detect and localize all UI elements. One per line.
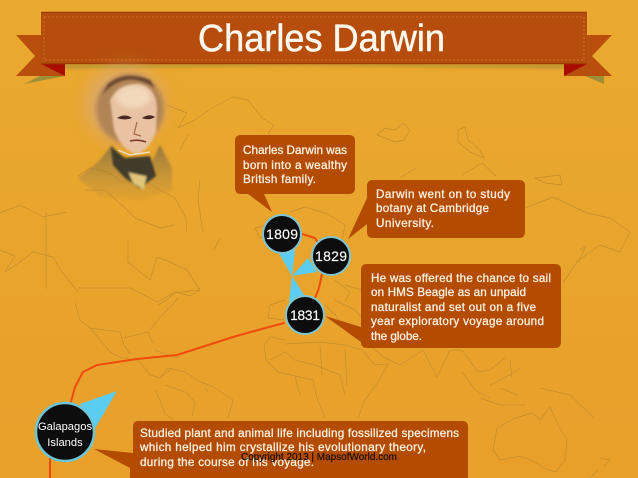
hair: [96, 74, 164, 144]
face: [110, 84, 157, 154]
Japan and far east: [535, 175, 586, 262]
callout: 1829 Cambridge: Darwin went on to study: [376, 188, 510, 201]
Alaska and northwest coast: [0, 205, 78, 292]
banner body: [41, 12, 587, 64]
Asia: [363, 197, 630, 377]
callout: Galapagos studies: which helped him crystallize his evolutionary theory,: [139, 441, 426, 454]
callout: 1831 HMS Beagle: naturalist and set out on a five: [371, 301, 536, 314]
Canadian Arctic and Canada: [78, 168, 200, 305]
South America: [155, 368, 233, 421]
callout: 1809 birth: born into a wealthy: [243, 159, 347, 172]
callout: 1809 birth: Charles Darwin was: [243, 144, 347, 157]
callout: 1831 HMS Beagle: the globe.: [371, 330, 422, 343]
neck stock and shirt: [111, 147, 156, 188]
callout: Galapagos studies: [94, 421, 468, 478]
marker: Galapagos Islands: Islands: [47, 437, 83, 449]
blue pointer wedges: [80, 250, 317, 430]
callout: Galapagos studies: Studied plant and animal life including fossilized specimens: [140, 427, 459, 440]
marker: 1831: 1831: [290, 307, 320, 323]
world map outline: [0, 97, 630, 478]
callout: 1829 Cambridge: University.: [376, 217, 434, 230]
marker: 1809: [263, 215, 301, 253]
callout: 1829 Cambridge: botany at Cambridge: [376, 202, 489, 215]
callout: 1831 HMS Beagle: on HMS Beagle as an unpaid: [371, 286, 526, 299]
Africa: [264, 337, 388, 418]
title banner: [16, 12, 612, 84]
marker: 1831: [286, 296, 324, 334]
marker: 1809: 1809: [266, 226, 298, 242]
coat: [78, 145, 172, 200]
callout: Galapagos studies: during the course of his voyage.: [140, 456, 314, 469]
banner shadow: [41, 64, 587, 69]
orange voyage route: [50, 234, 322, 478]
Central America and Caribbean: [143, 350, 178, 378]
callout: 1831 HMS Beagle: [325, 264, 561, 348]
Europe: [255, 207, 362, 328]
callout: 1809 birth: [235, 135, 355, 212]
callout: 1831 HMS Beagle: He was offered the chance to sail: [371, 272, 551, 285]
portrait of Charles Darwin: [78, 67, 172, 200]
Greenland: [167, 97, 274, 250]
marker: 1829: 1829: [315, 248, 347, 264]
facial features: [117, 115, 155, 142]
US border and continental US: [75, 288, 200, 366]
callout: 1809 birth: British family.: [243, 173, 316, 186]
title text: Charles Darwin: [198, 18, 445, 60]
marker: Galapagos Islands: [36, 403, 94, 461]
callout: 1829 Cambridge: [348, 180, 525, 239]
Arctic islands: [377, 123, 496, 178]
Australia: [493, 407, 567, 472]
marker: Galapagos Islands: Galapagos: [38, 421, 92, 433]
copyright notice: Copyright 2013 | MapsofWorld.com: [241, 451, 397, 463]
left ribbon tail: [16, 35, 65, 84]
Southeast Asia and Indonesia: [462, 360, 593, 417]
marker: 1829: [312, 237, 350, 275]
callout: 1831 HMS Beagle: year exploratory voyage around: [371, 315, 544, 328]
New Zealand: [590, 458, 610, 478]
right ribbon tail: [564, 35, 612, 84]
